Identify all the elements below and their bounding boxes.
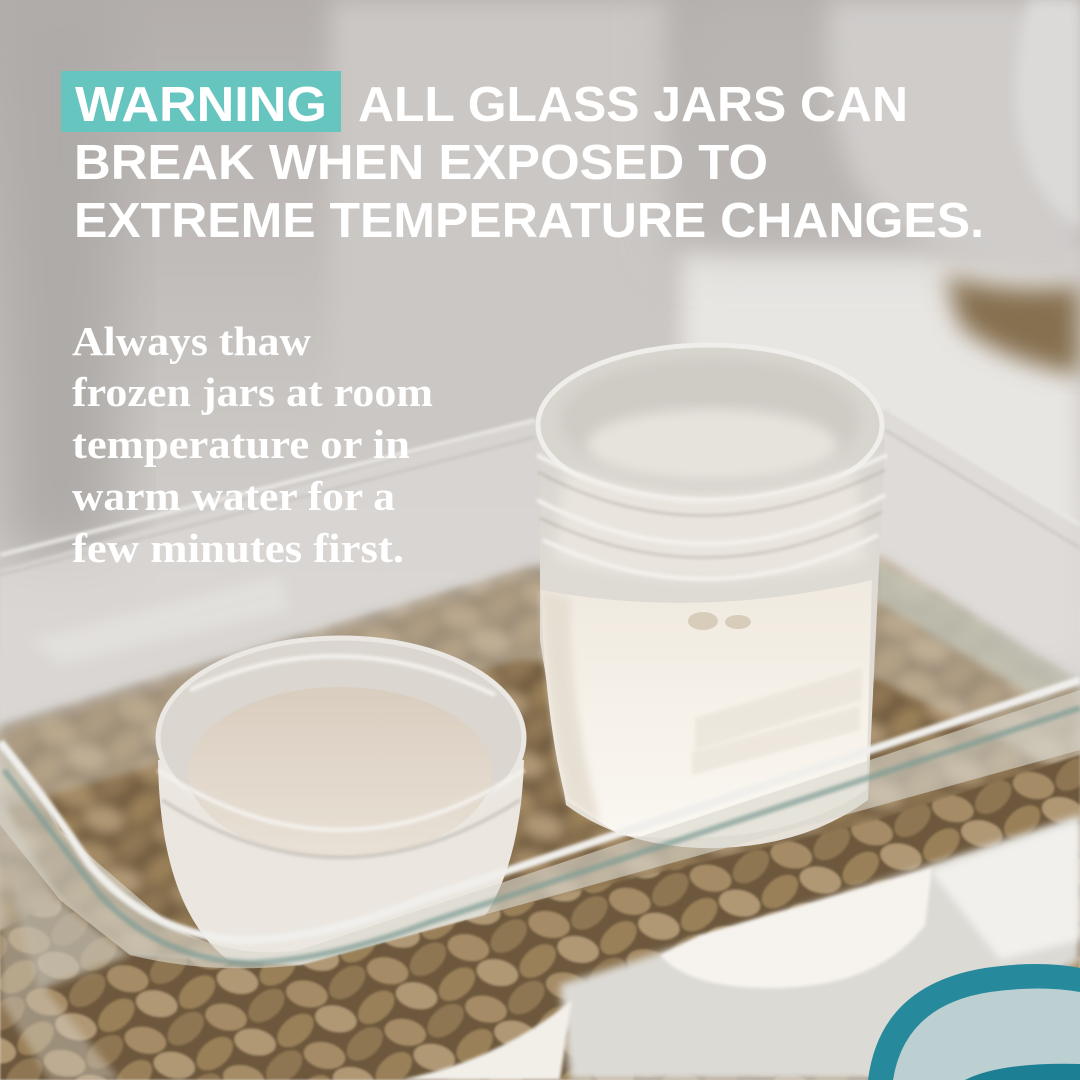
short jar body xyxy=(158,760,524,980)
heading line 1: ALL GLASS JARS CAN xyxy=(358,78,908,132)
dish base reflections and milk seen through glass xyxy=(0,800,1080,1080)
instruction line 4: warm water for a xyxy=(72,473,395,519)
milk bubbles xyxy=(688,612,718,630)
instruction line 5: few minutes first. xyxy=(72,525,404,571)
warning heading xyxy=(61,71,984,248)
glass corner left xyxy=(0,840,120,1080)
jar threads xyxy=(537,455,887,579)
instruction line 1: Always thaw xyxy=(72,318,311,364)
short jar milk surface xyxy=(188,687,492,857)
warning badge xyxy=(61,71,341,132)
heading line 3: EXTREME TEMPERATURE CHANGES. xyxy=(74,194,984,248)
jar rim xyxy=(538,345,882,505)
glass baking dish: back wall xyxy=(0,410,1080,720)
short jar rim xyxy=(158,638,524,838)
heading line 2: BREAK WHEN EXPOSED TO xyxy=(74,136,768,190)
woven placemat: sharp near band xyxy=(0,755,1080,1080)
thawing instructions xyxy=(72,318,433,571)
tall milk jar xyxy=(537,345,887,848)
short milk jar xyxy=(158,638,524,980)
instruction line 2: frozen jars at room xyxy=(72,369,433,415)
jar milk xyxy=(541,580,872,838)
warning word: WARNING xyxy=(75,78,327,132)
embossed jar lettering xyxy=(692,668,862,775)
teal bottle lid xyxy=(868,964,1080,1080)
woven placemat: blurred far side xyxy=(0,560,1080,960)
milk reflection left xyxy=(400,1000,572,1080)
jar glass body xyxy=(540,440,885,848)
glass baking dish: front rim xyxy=(0,680,1080,968)
instruction line 3: temperature or in xyxy=(72,421,410,467)
milk reflection right xyxy=(660,868,932,988)
